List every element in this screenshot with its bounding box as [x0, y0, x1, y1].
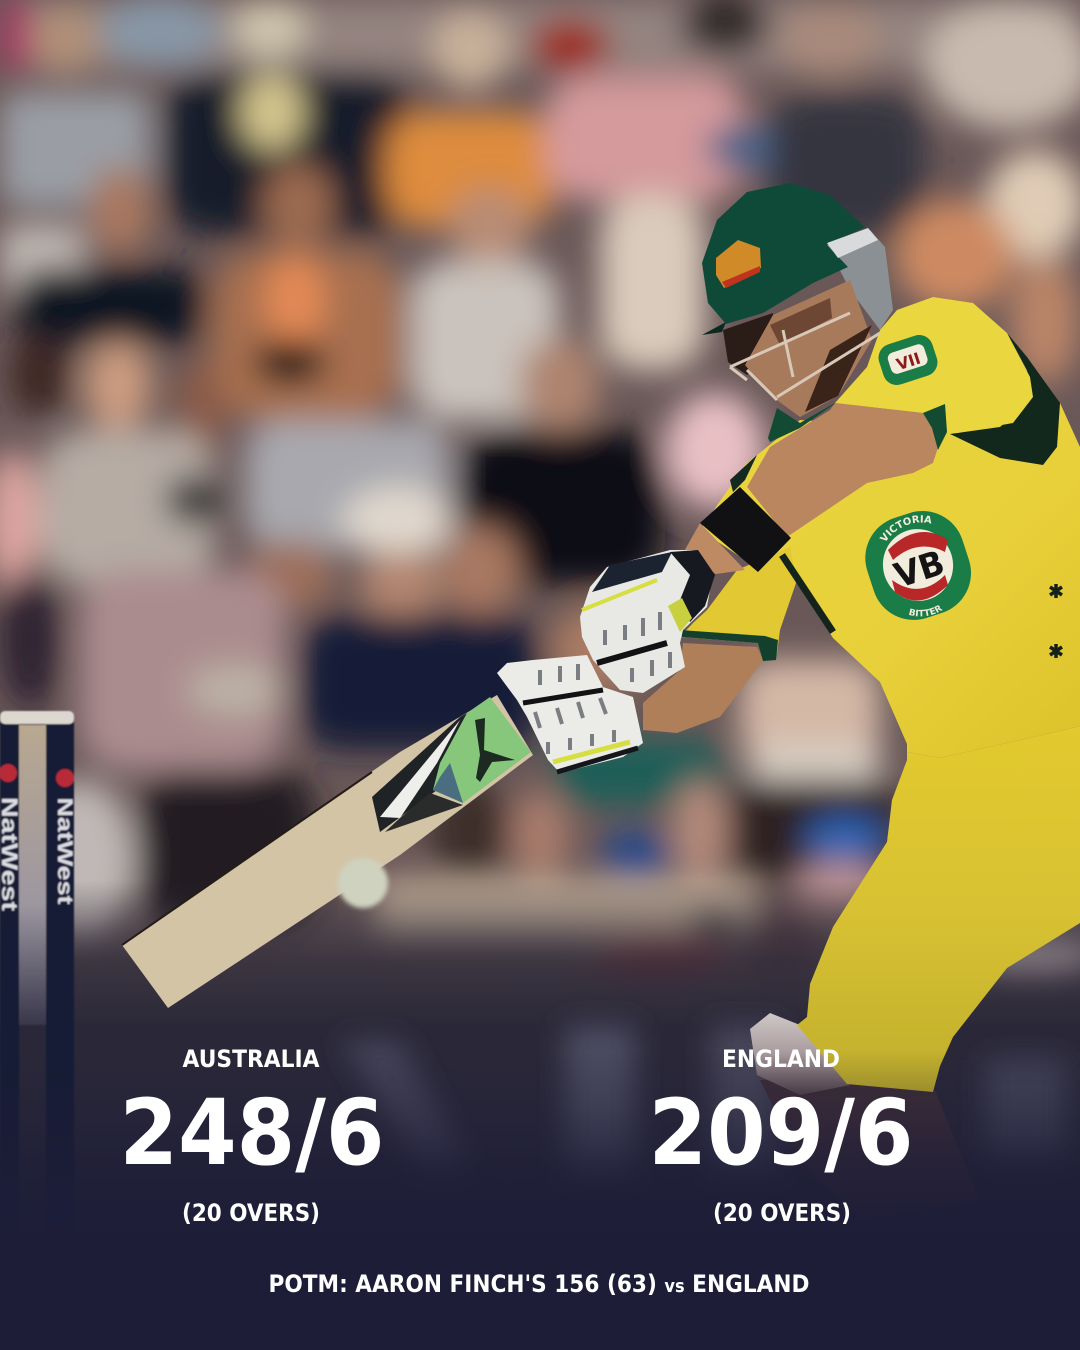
shirt side seam — [782, 555, 833, 632]
VII bitter patch — [875, 331, 941, 389]
cricket ball — [338, 858, 388, 908]
helmet neck guard grille — [827, 230, 893, 330]
bat sticker — [372, 697, 531, 832]
sleeve band — [923, 404, 947, 450]
bat top edge shadow — [122, 772, 372, 945]
hand between wristband and glove — [682, 523, 745, 574]
helmet crest — [716, 240, 761, 288]
sleeve trim — [680, 630, 778, 661]
helmet bracket — [827, 228, 878, 258]
VB logo badge: BITTER — [909, 605, 942, 616]
shirt side panel — [950, 333, 1060, 465]
ground-level advertising board — [340, 937, 1080, 1175]
team name: ENGLAND — [722, 1045, 840, 1073]
helmet shell — [702, 183, 865, 324]
bottom navy fade — [0, 1050, 1080, 1240]
shirt torso — [700, 395, 1080, 758]
front sleeve of rear arm — [680, 547, 797, 660]
rear arm — [643, 643, 763, 733]
puma logo — [475, 718, 515, 782]
VII bitter patch: VII — [894, 349, 923, 374]
shoulder sleeve — [835, 297, 1033, 433]
score: 209/6 — [648, 1081, 914, 1186]
batter — [497, 183, 1080, 1150]
cricket bat — [122, 695, 533, 1008]
player of the match line: POTM: AARON FINCH'S 156 (63) vs ENGLAND — [268, 1270, 810, 1298]
collar — [768, 400, 840, 442]
VB logo badge: VICTORIA — [879, 515, 932, 541]
VB logo badge — [865, 511, 971, 620]
head — [702, 183, 893, 417]
wristband — [700, 487, 791, 572]
helmet peak tip — [702, 322, 726, 335]
bottom glove — [497, 655, 643, 773]
helmet wires — [730, 313, 880, 400]
team name: AUSTRALIA — [182, 1045, 320, 1073]
stumps — [0, 711, 76, 1242]
VB logo badge: VB — [890, 543, 950, 597]
face — [745, 280, 872, 417]
score: Australia — [120, 1045, 384, 1227]
shoe — [750, 1013, 850, 1095]
overs: (20 OVERS) — [182, 1199, 320, 1227]
dark ground fade behind the batter — [0, 880, 1080, 1250]
shirt stars — [1050, 584, 1062, 658]
score: England — [648, 1045, 914, 1227]
stumps: NatWest — [53, 798, 76, 904]
hair — [723, 313, 773, 375]
trousers — [797, 726, 1080, 1092]
overs: (20 OVERS) — [713, 1199, 851, 1227]
top glove — [580, 550, 715, 693]
score: 248/6 — [120, 1081, 384, 1186]
front arm — [747, 403, 943, 537]
leg shadow and pad — [760, 1080, 980, 1220]
